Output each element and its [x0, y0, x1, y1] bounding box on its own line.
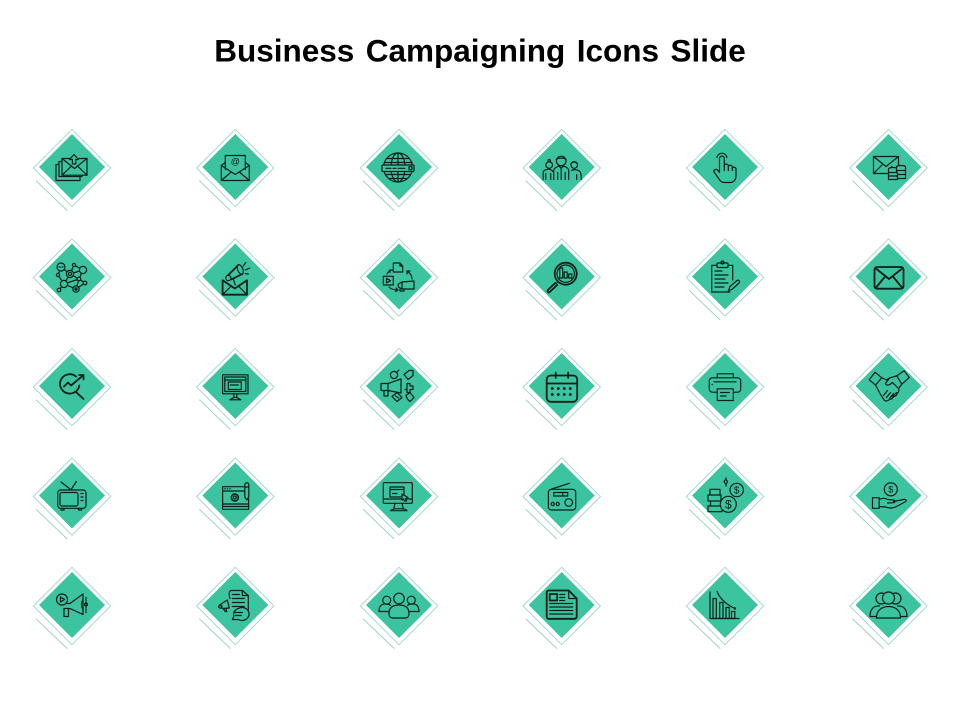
icon: overlapping people	[870, 592, 907, 618]
icon: magnifier with bar chart	[548, 263, 577, 292]
icon: megaphone with play button	[56, 594, 88, 616]
tile: audience	[360, 567, 438, 649]
icon: closed envelope	[874, 267, 904, 289]
tile: online ad monitor	[360, 458, 438, 539]
icon: desktop monitor with webpage	[223, 375, 248, 400]
tile: email upload	[33, 129, 111, 211]
tile: handshake	[850, 348, 927, 430]
tile: television	[33, 458, 111, 539]
icon: newspaper	[547, 590, 577, 619]
icon: envelope with coin stacks	[874, 156, 906, 180]
tile: click	[686, 129, 764, 211]
tile: money	[686, 458, 764, 539]
icon: monitor with ad window and cursor	[383, 483, 412, 511]
tile: declining chart	[686, 567, 764, 649]
tile: printer	[686, 348, 764, 430]
icon: declining bar chart	[710, 592, 739, 618]
icon: cycle of document, video and megaphone	[383, 263, 414, 292]
icon: coin stack with dollar coins	[708, 478, 743, 512]
tile: newspaper	[523, 567, 600, 649]
tile: radio	[523, 458, 600, 539]
tile: mail	[850, 239, 927, 320]
icon: handshake	[869, 371, 909, 401]
icon: hand holding coin: $	[888, 484, 893, 494]
tile: search analytics	[523, 239, 600, 320]
icon: coin stack with dollar coins: $	[734, 486, 740, 496]
tile: email address	[197, 129, 274, 211]
tile: email and coins	[850, 129, 927, 211]
icon: browser with gear and pen	[223, 483, 249, 509]
icon: three business people	[543, 156, 581, 180]
icon: group of three people	[379, 593, 419, 618]
icon: globe with search bar	[382, 153, 414, 182]
tile: content cycle	[360, 239, 438, 320]
tile: web design	[197, 458, 274, 539]
icon: envelope with megaphone	[223, 262, 250, 295]
icon: retro TV	[58, 482, 86, 510]
icon: radio	[548, 483, 576, 510]
tile: payment	[850, 458, 927, 539]
tile: network	[33, 239, 111, 320]
icon: clipboard and pencil	[712, 261, 740, 292]
icon: social network nodes	[56, 263, 87, 292]
icon: open envelope with at sign: @	[231, 156, 240, 166]
icon: pointing hand	[714, 153, 736, 182]
title: Business Campaigning Icons Slide	[214, 32, 746, 68]
tile: growth search	[33, 348, 111, 430]
icon: printer	[709, 374, 741, 400]
icon: magnifier with rising arrow	[60, 374, 84, 399]
tile: clipboard	[686, 239, 764, 320]
icon: megaphone with marketing symbols	[381, 370, 414, 402]
tile: video promotion	[33, 567, 111, 649]
tile: team	[523, 129, 600, 211]
icon: calendar	[547, 372, 577, 402]
icon: coin stack with dollar coins: $	[725, 498, 732, 512]
tile: marketing megaphone	[360, 348, 438, 430]
tile: calendar	[523, 348, 600, 430]
tile: mail marketing	[197, 239, 274, 320]
tile: globe	[360, 129, 438, 211]
icon: document, megaphone and speech bubble	[219, 590, 249, 620]
icon: email stack with upload arrow	[56, 154, 87, 180]
tile: team group	[850, 567, 927, 649]
tile: web monitor	[197, 348, 274, 430]
tile: content messaging	[197, 567, 274, 649]
